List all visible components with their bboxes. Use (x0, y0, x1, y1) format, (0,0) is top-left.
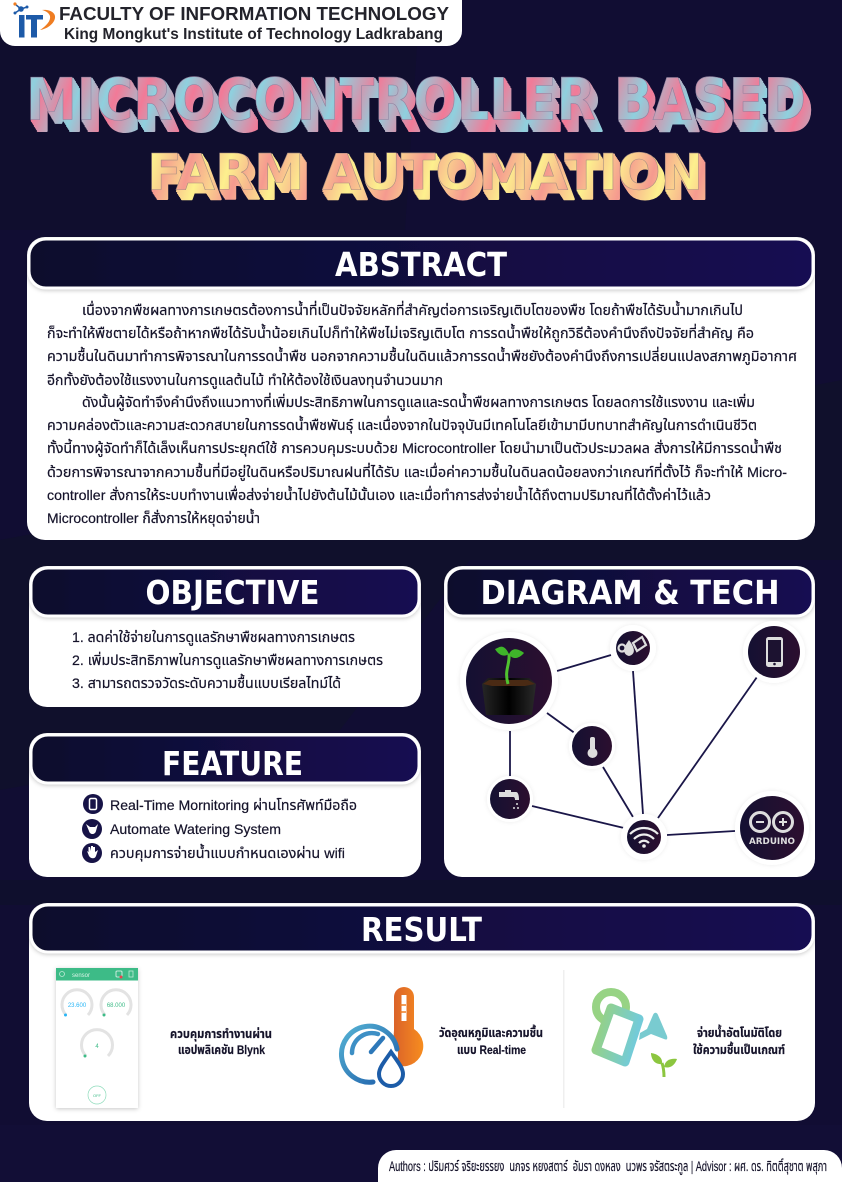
app screenshot: 68.000 (107, 1003, 126, 1009)
objective heading: OBJECTIVE (146, 573, 320, 612)
result header bar (31, 905, 813, 952)
abstract body text: Microcontroller ก็สั่งการให้หยุดจ่ายน้ำ (47, 508, 260, 527)
diagram heading: DIAGRAM & TECH (480, 573, 780, 612)
app screenshot: sensor (72, 973, 90, 979)
feature text: watering: Automate Watering System (110, 821, 281, 837)
title line 2: FARM AUTOMATION (151, 150, 707, 208)
result text: app control: ควบคุมการทำงานผ่าน (170, 1027, 272, 1041)
node: arduino (735, 791, 809, 865)
abstract body text: เนื่องจากพืชผลทางการเกษตรต้องการน้ำที่เป็นปัจจัยหลักที่สำคัญต่อการเจริญเติบโตของพืช โดยถ้าพืชได้รับน้ำมากเกินไป (82, 300, 743, 318)
result text: automatic watering: จ่ายน้ำอัตโนมัติโดย (697, 1024, 782, 1040)
panel: objective (29, 566, 421, 707)
node: water tap (487, 776, 533, 822)
abstract body text: ก็จะทำให้พืชตายได้หรือถ้าหากพืชได้รับน้ำน้อยเกินไปก็ทำให้พืชไม่เจริญเติบโต การรดน้ำพืชให้ถูกวิธีต้องคำนึงถึงปัจจัยที่สำคัญ คือ (47, 323, 754, 342)
abstract body text: ทั้งนี้ทางผู้จัดทำก็ได้เล็งเห็นการประยุกต์ใช้ การควบคุมระบบด้วย Microcontroller โดยนำมาเป็นตัวประมวลผล สั่งการให้มีการรดน้ำพืช (47, 438, 782, 457)
abstract body text: ด้วยการพิจารณาจากความชื้นที่มีอยู่ในดินหรือปริมาณฝนที่ได้รับ และเมื่อค่าความชื้นในดินลดน้อยลงกว่าเกณฑ์ที่ตั้งไว้ ก็จะทำให้ Micro- (47, 462, 787, 481)
abstract header bar (29, 239, 813, 288)
node: wifi (621, 814, 667, 860)
diagram header bar (446, 568, 813, 616)
divider (563, 970, 564, 1108)
network diagram connections (510, 655, 757, 835)
feature text: monitoring: Real-Time Mornitoring ผ่านโทรศัพท์มือถือ (110, 797, 357, 813)
icon: hand (82, 843, 102, 863)
node: temperature sensor (569, 723, 615, 769)
abstract body text: ดังนั้นผู้จัดทำจึงคำนึงถึงแนวทางที่เพิ่มประสิทธิภาพในการดูแลและรดน้ำพืชผลทางการเกษตร โดยลดการใช้แรงงาน และเพิ่ม (82, 392, 755, 411)
result text: automatic watering: ใช้ความชื้นเป็นเกณฑ์ (693, 1041, 785, 1057)
abstract body text: ความชื้นในดินมาทำการพิจารณาในการรดน้ำพืช นอกจากความชื้นในดินแล้วการรดน้ำพืชยังต้องคำนึงถึงการเปลี่ยนแปลงสภาพภูมิอากาศ (47, 346, 797, 365)
abstract body text: ความคล่องตัวและความสะดวกสบายในการรดน้ำพืชพันธุ์ และเนื่องจากในปัจจุบันมีเทคโนโลยีเข้ามามีบทบาทสำคัญในการดำเนินชีวิต (47, 415, 757, 434)
icon: watering can with sprout (596, 992, 677, 1077)
feature text: manual control: ควบคุมการจ่ายน้ำแบบกำหนดเองผ่าน wifi (110, 843, 345, 862)
app screenshot: OFF (93, 1093, 102, 1098)
feature heading: FEATURE (162, 744, 303, 783)
result text: realtime measurement: แบบ Real-time (457, 1043, 526, 1057)
authors footer (378, 1150, 842, 1182)
objective header bar (31, 568, 419, 616)
result text: realtime measurement: วัดอุณหภูมิและความชื้น (439, 1024, 543, 1041)
node: plant pot (460, 632, 558, 730)
node: smartphone (743, 621, 805, 683)
result text: automatic watering (693, 1024, 785, 1057)
institute name: King Mongkut's Institute of Technology Ladkrabang (64, 26, 443, 43)
title (26, 66, 813, 211)
app screenshot: 4 (95, 1044, 99, 1050)
result text: app control: แอปพลิเคชัน Blynk (178, 1043, 265, 1057)
result text: app control (170, 1027, 272, 1057)
title line 2: FARM AUTOMATION (149, 147, 705, 205)
objective list: 2. เพิ่มประสิทธิภาพในการดูแลรักษาพืชผลทางการเกษตร (72, 651, 383, 669)
faculty name: FACULTY OF INFORMATION TECHNOLOGY (59, 4, 449, 24)
objective list: 3. สามารถตรวจวัดระดับความชื้นแบบเรียลไทม์ได้ (72, 673, 341, 691)
icon: watering can (82, 819, 102, 839)
objective list (72, 629, 383, 691)
header: faculty logo banner (0, 0, 462, 46)
app screenshot: 23.600 (68, 1003, 87, 1009)
node: arduino: ARDUINO (749, 837, 795, 847)
abstract body text: อีกทั้งยังต้องใช้แรงงานในการดูแลต้นไม้ ทำให้ต้องใช้เงินลงทุนจำนวนมาก (47, 371, 443, 389)
title line 2: FARM AUTOMATION (150, 148, 706, 206)
panel: feature (29, 733, 421, 877)
feature header bar (31, 735, 419, 783)
abstract heading: ABSTRACT (335, 245, 507, 284)
panel: result (29, 903, 815, 1121)
icon: IT logo (13, 2, 55, 37)
node: moisture sensor (610, 625, 656, 671)
icon: temperature and humidity gauge (341, 987, 423, 1086)
icon: phone (83, 794, 103, 814)
objective list: 1. ลดค่าใช้จ่ายในการดูแลรักษาพืชผลทางการเกษตร (72, 629, 355, 646)
result heading: RESULT (361, 910, 482, 949)
result text: realtime measurement (439, 1024, 543, 1057)
abstract body text (47, 300, 797, 527)
title line 2: FARM AUTOMATION (147, 144, 703, 202)
title line 2: FARM AUTOMATION (148, 145, 704, 203)
title line 2: FARM AUTOMATION (152, 152, 708, 210)
panel: abstract (27, 237, 815, 540)
title line 2: FARM AUTOMATION (153, 153, 709, 211)
abstract body text: controller สั่งการให้ระบบทำงานเพื่อส่งจ่ายน้ำไปยังต้นไม้นั้นเอง และเมื่อทำการส่งจ่ายน้ำได้ถึงตามปริมาณที่ได้ตั้งค่าไว้แล้ว (47, 485, 711, 503)
app screenshot (56, 968, 138, 1108)
panel: diagram and tech (444, 566, 815, 877)
